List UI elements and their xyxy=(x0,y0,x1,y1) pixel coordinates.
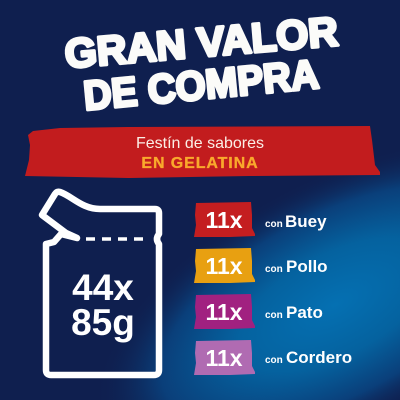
flavour: buey xyxy=(194,202,327,237)
flavour: pollo: 11x xyxy=(205,253,243,279)
flavour: cordero: con xyxy=(265,355,283,366)
pouch label: 44x xyxy=(72,267,134,308)
flavour: pato xyxy=(194,294,323,329)
title: GRAN VALOR xyxy=(63,8,340,77)
banner: en gelatina xyxy=(25,126,380,178)
flavour: pollo: con xyxy=(265,264,283,275)
flavour: buey: con xyxy=(265,219,283,230)
pouch label: 85g xyxy=(71,302,135,343)
tear line xyxy=(86,237,146,241)
flavour: pollo: Pollo xyxy=(286,257,328,276)
flavour: buey: Buey xyxy=(285,212,327,231)
flavour: cordero: Cordero xyxy=(286,348,352,367)
pouch label xyxy=(71,267,135,343)
title xyxy=(63,8,340,119)
flavour: pato: con xyxy=(265,310,283,321)
flavour: cordero xyxy=(194,340,352,375)
banner line two: EN GELATINA xyxy=(141,155,259,172)
flavour: pato: Pato xyxy=(286,303,323,322)
icon: pouch xyxy=(42,192,159,375)
pouch outline xyxy=(42,192,159,375)
banner line one: Festín de sabores xyxy=(136,135,264,152)
flavour: pato: 11x xyxy=(205,299,243,325)
flavour: buey: 11x xyxy=(205,207,243,233)
title: DE COMPRA xyxy=(82,51,321,119)
flavour: pollo xyxy=(194,248,328,283)
flavour: cordero: 11x xyxy=(205,345,243,371)
banner shape xyxy=(25,126,380,178)
